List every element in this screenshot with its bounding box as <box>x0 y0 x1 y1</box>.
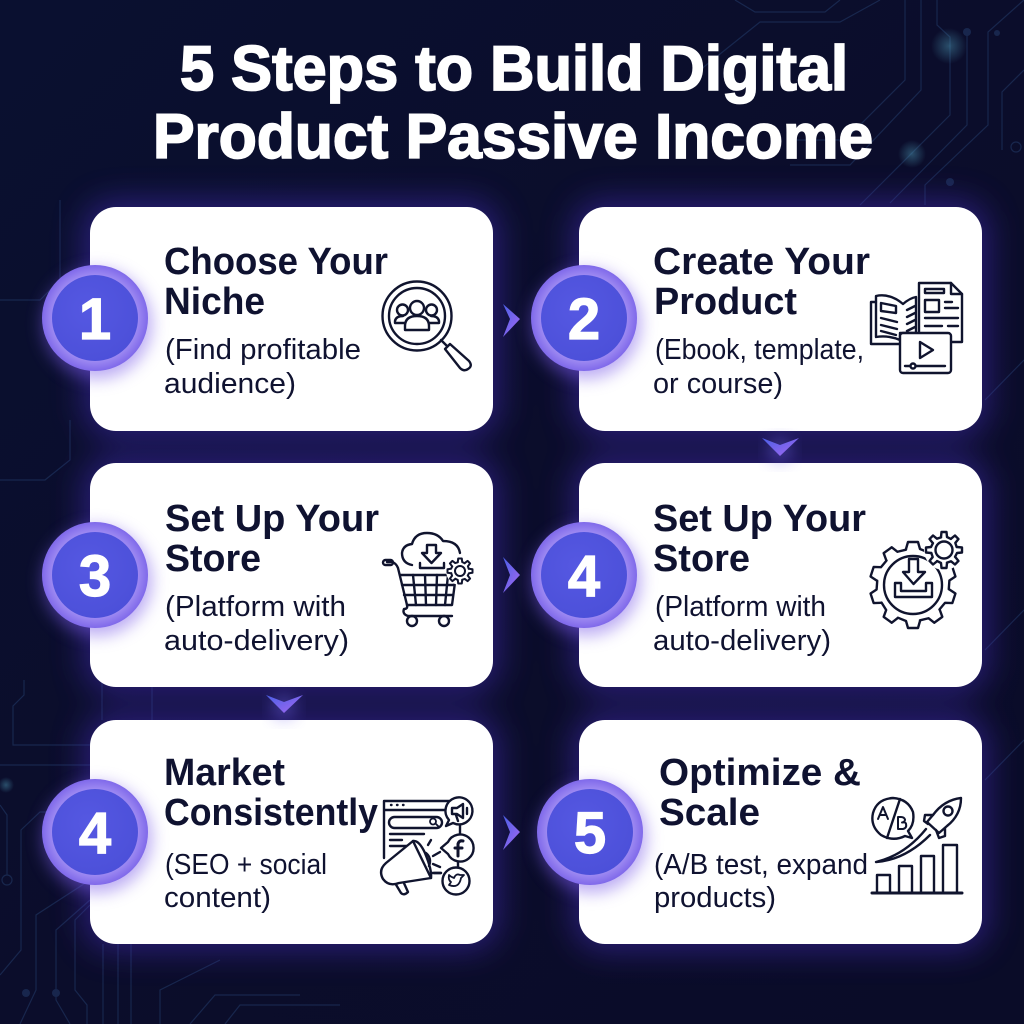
heading: optimize and scale: Scale <box>659 792 760 834</box>
text: seo and social content: (SEO + social <box>165 849 327 881</box>
heading: optimize and scale: Optimize & <box>659 752 861 794</box>
heading: create your product <box>653 241 870 323</box>
badge: number 1: 1 <box>79 287 111 352</box>
text: ab test expand products: (A/B test, expand <box>654 849 868 881</box>
heading: choose your niche: Choose Your <box>164 241 388 283</box>
text: ab test expand products <box>654 849 868 914</box>
badge: number 3 <box>42 522 152 636</box>
badge: number 2: 2 <box>568 287 600 352</box>
text: ebook template or course: or course) <box>653 368 783 400</box>
title: 5 Steps to Build Digital <box>180 34 848 104</box>
panel: step 1 choose your niche <box>90 207 493 431</box>
text: platform with auto-delivery <box>164 591 349 657</box>
text: ab test expand products: products) <box>654 882 776 914</box>
text: seo and social content: content) <box>164 882 271 914</box>
text: find profitable audience: audience) <box>164 368 296 400</box>
card glow <box>84 201 988 950</box>
arrow: step 3 to 5 <box>266 695 303 719</box>
arrow: step 2 to 4 <box>762 438 799 462</box>
arrow: step 5 to 6 <box>503 815 520 850</box>
heading: set up your store: Store <box>653 538 750 580</box>
icon: ab bubble, rocket and bar chart <box>872 798 962 893</box>
icon: browser, megaphone and social bubbles <box>381 797 474 894</box>
panel: step 3 set up your store <box>90 463 493 687</box>
text: seo and social content <box>164 849 327 914</box>
badge: number 4 second: 4 <box>79 801 111 866</box>
badge: number 5: 5 <box>574 801 606 866</box>
badge: number 1 <box>42 265 152 379</box>
text: ebook template or course: (Ebook, template, <box>655 334 864 366</box>
text: platform with auto-delivery: (Platform with <box>165 591 346 623</box>
badge: number 4 second <box>42 779 152 893</box>
heading: choose your niche <box>164 241 388 323</box>
heading: create your product: Product <box>654 281 797 323</box>
badge: number 2 <box>531 265 641 379</box>
text: find profitable audience <box>164 334 361 400</box>
panel: step 4 set up your store <box>579 463 982 687</box>
heading: set up your store <box>165 498 379 580</box>
heading: optimize and scale <box>659 752 861 834</box>
heading: market consistently: Consistently <box>164 792 378 834</box>
badge: number 5 <box>537 779 647 893</box>
text: find profitable audience: (Find profitable <box>165 334 361 366</box>
arrow: step 3 to 4 <box>503 557 520 593</box>
heading: set up your store: Set Up Your <box>653 498 866 540</box>
panel: step 2 create your product <box>579 207 982 431</box>
badge: number 4: 4 <box>568 544 600 609</box>
panel: step 5 market consistently <box>90 720 493 944</box>
text: platform with auto-delivery: auto-delivery) <box>164 625 349 657</box>
title <box>153 34 873 172</box>
heading: market consistently <box>164 752 378 834</box>
icon: shopping cart with cloud and gear <box>383 533 474 626</box>
heading: set up your store <box>653 498 866 580</box>
title: Product Passive Income <box>153 102 873 172</box>
panel: step 6 optimize and scale <box>579 720 982 944</box>
arrow: step 1 to 2 <box>503 304 520 337</box>
icon: magnifier with people <box>382 282 471 370</box>
icon: gears with download arrow <box>867 530 964 629</box>
heading: choose your niche: Niche <box>164 281 265 323</box>
heading: create your product: Create Your <box>653 241 870 283</box>
heading: market consistently: Market <box>164 752 285 794</box>
text: platform with auto-delivery: auto-delivery) <box>653 625 831 657</box>
text: platform with auto-delivery: (Platform with <box>655 591 826 623</box>
badge: number 3: 3 <box>79 544 111 609</box>
heading: set up your store: Store <box>165 538 261 580</box>
icon: book, document and video <box>871 283 962 373</box>
badge: number 4 <box>531 522 641 636</box>
text: platform with auto-delivery <box>653 591 831 657</box>
heading: set up your store: Set Up Your <box>165 498 379 540</box>
text: ebook template or course <box>653 334 864 400</box>
